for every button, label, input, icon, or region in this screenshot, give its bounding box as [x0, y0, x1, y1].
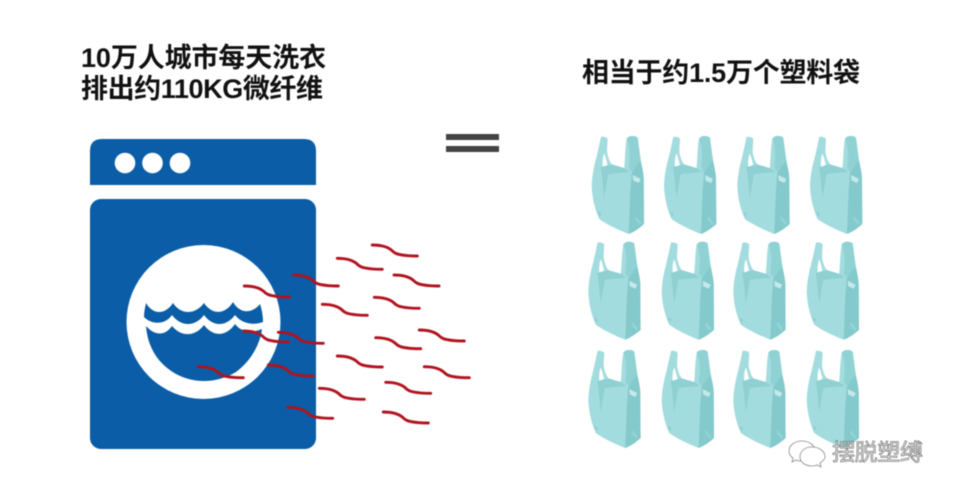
machine body — [90, 199, 316, 449]
plastic bags grid — [588, 136, 862, 448]
title: washing machine microfibre output — [81, 42, 326, 104]
icon: chat bubbles — [789, 441, 825, 467]
account name: 摆脱塑缚 — [832, 439, 923, 465]
title: plastic bag equivalent: 相当于约1.5万个塑料袋 — [582, 58, 860, 88]
watermark — [789, 439, 923, 467]
title: washing machine microfibre output: 10万人城市每天洗衣 — [81, 42, 326, 73]
microfibres — [198, 245, 469, 423]
icon: equals sign — [446, 134, 499, 152]
title: washing machine microfibre output: 排出约110KG微纤维 — [81, 74, 323, 104]
icon: washing machine — [90, 139, 316, 449]
door with water — [126, 245, 280, 399]
control panel — [90, 139, 316, 185]
